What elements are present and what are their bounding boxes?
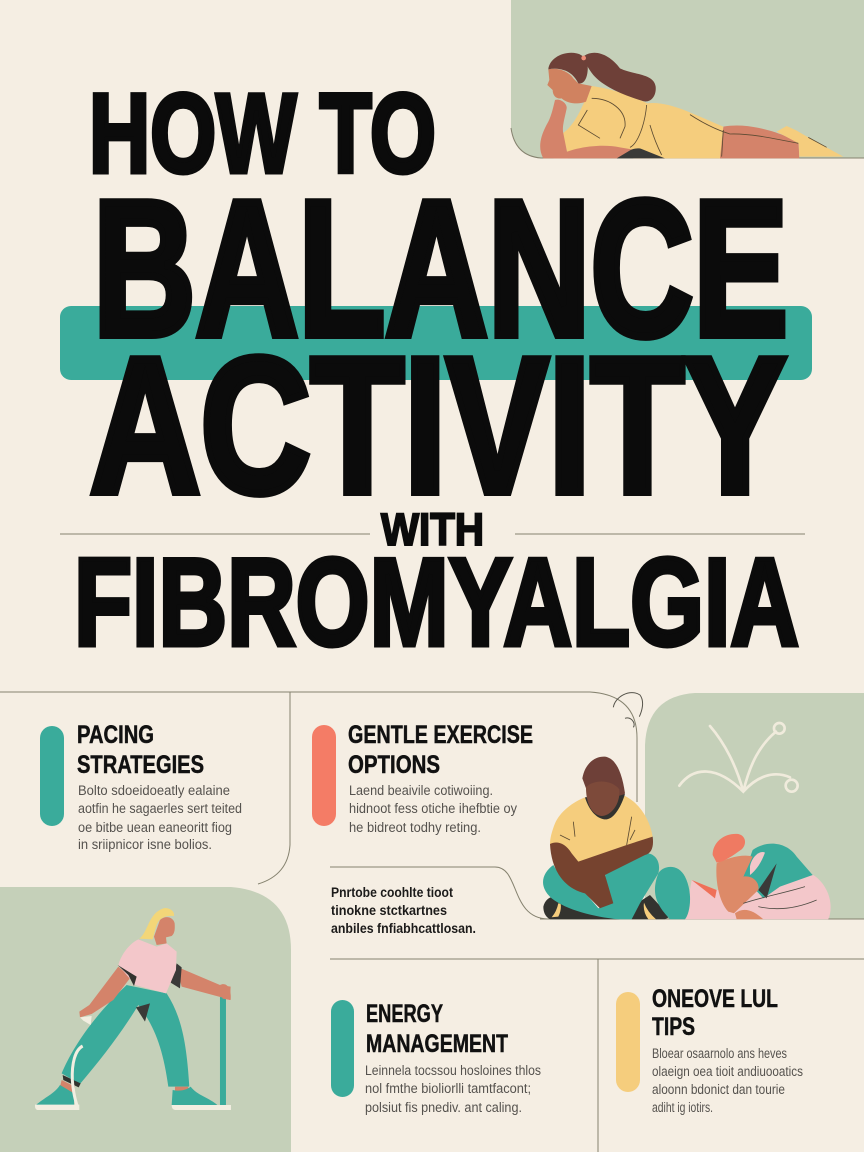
callout text: Pnrtobe coohlte tioot [331, 885, 453, 900]
accent band [60, 306, 812, 380]
section: oneove lul tips: adiht ig iotirs. [652, 1100, 713, 1115]
section: pacing strategies: in sriipnicor isne bolios. [78, 837, 212, 852]
section: gentle exercise options: he bidreot todhy reting. [349, 820, 481, 835]
heading: ONEOVE LUL [652, 985, 778, 1013]
illustration: woman lying on stomach [540, 53, 843, 158]
title line: with: WITH [381, 504, 484, 555]
icon: small doodle loop above panel [613, 693, 643, 727]
title line: how to: HOW TO [89, 71, 436, 196]
back arm [177, 967, 231, 1000]
divider lines [0, 692, 864, 1152]
section: energy management: polsiut fis pnediv. ant caling. [365, 1100, 522, 1115]
pill: yellow [616, 992, 640, 1092]
ankles [60, 1080, 75, 1093]
body text: Leinnela tocssou hosloines thlos [365, 1063, 541, 1078]
shoes [36, 1085, 74, 1105]
front arm [79, 967, 131, 1017]
body text: Laend beaivile cotiwoiing. [349, 783, 493, 798]
panel: top right green with lying figure [511, 0, 864, 158]
cane [220, 995, 226, 1105]
pill: teal [40, 726, 64, 826]
pill: coral [312, 725, 336, 826]
section: pacing strategies: aotfin he sagaerles sert teited [78, 801, 242, 816]
pill: teal [331, 1000, 354, 1097]
seated person [543, 757, 690, 919]
body text: Bloear osaarnolo ans heves [652, 1046, 787, 1061]
section: gentle exercise options [312, 721, 533, 835]
section: energy management: nol fmthe bioliorlli tamtfacont; [365, 1081, 531, 1096]
section: oneove lul tips [616, 985, 803, 1115]
callout text [331, 885, 476, 936]
heading: PACING [77, 721, 154, 749]
title [60, 71, 812, 672]
section: pacing strategies [40, 721, 242, 852]
trousers [62, 985, 189, 1087]
illustration: seated person and resting person [543, 757, 831, 919]
strap [72, 1046, 83, 1107]
callout text: anbiles fnfiabhcattlosan. [331, 921, 476, 936]
icon: sprout doodle on green [679, 723, 798, 792]
section: oneove lul tips: olaeign oea tioit andiuooatics [652, 1064, 803, 1079]
panel: bottom left green [0, 887, 291, 1152]
callout text: tinokne stctkartnes [331, 903, 447, 918]
heading: ENERGY [366, 1000, 443, 1028]
section: oneove lul tips: TIPS [652, 1013, 695, 1041]
section: gentle exercise options: hidnoot fess otiche ihefbtie oy [349, 801, 517, 816]
shirt [118, 939, 177, 993]
panel: right green backdrop [645, 693, 864, 919]
body text: Bolto sdoeidoeatly ealaine [78, 783, 230, 798]
resting person [685, 834, 831, 919]
illustration: woman stretching with cane [35, 908, 231, 1110]
section: pacing strategies: STRATEGIES [77, 751, 204, 779]
section: gentle exercise options: OPTIONS [348, 751, 440, 779]
section: pacing strategies: oe bitbe uean eaneoritt fiog [78, 820, 232, 835]
section: energy management: MANAGEMENT [366, 1030, 508, 1058]
head and hair [154, 917, 175, 945]
section: energy management [331, 1000, 541, 1115]
section: oneove lul tips: aloonn bdonict dan tourie [652, 1082, 785, 1097]
heading: GENTLE EXERCISE [348, 721, 533, 749]
